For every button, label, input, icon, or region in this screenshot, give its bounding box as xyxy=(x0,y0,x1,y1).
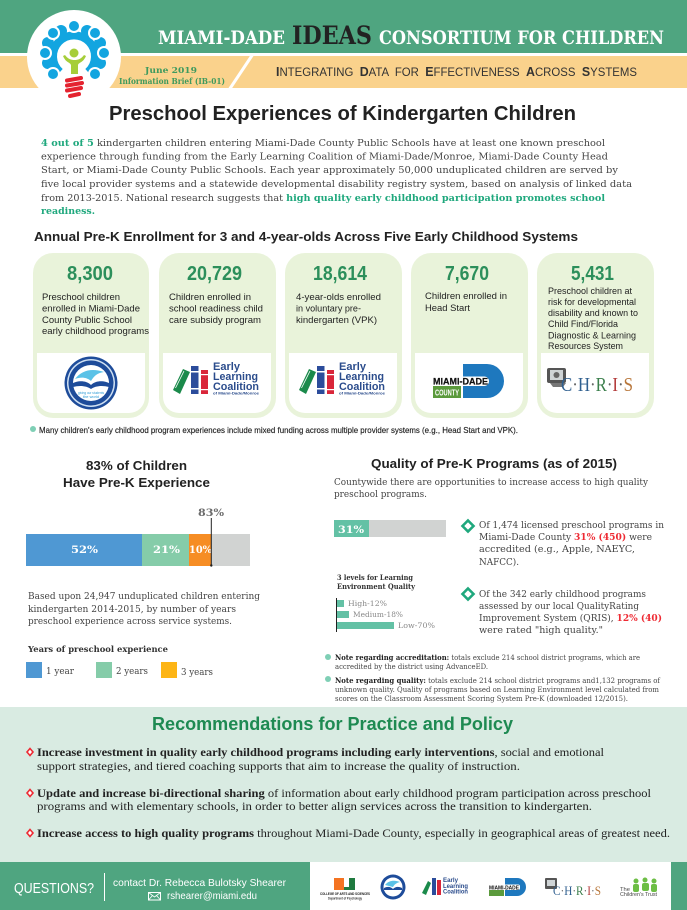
chart legend: 1 year xyxy=(46,666,74,677)
intro paragraph: experience through funding from the Early Learning Coalition of Miami-Dade/Monroe, Miami-Dade County Head xyxy=(41,152,608,162)
intro paragraph: Start, or Miami-Dade County Public Schools. Each year approximately 50,000 unduplicated children are served by xyxy=(41,165,619,176)
intro paragraph: from 2013-2015. National research suggests that high quality early childhood participation promotes school xyxy=(41,193,605,204)
card description xyxy=(548,286,638,352)
recommendation 2: programs and with elementary schools, in order to better align services across the transition to kindergarten. xyxy=(37,801,592,813)
icon: Early Learning Coalition logo xyxy=(299,361,385,396)
quality rating callout: Improvement System (QRIS), 12% (40) xyxy=(479,613,662,624)
quality rating callout: were rated "high quality." xyxy=(479,625,603,636)
icon: Early Learning Coalition small: Coalition xyxy=(443,888,468,896)
heading: 83 percent: 83% of Children xyxy=(86,458,187,473)
icon: Early Learning Coalition logo: Coalition xyxy=(339,381,385,393)
card description: Head Start xyxy=(425,303,470,314)
panel: school readiness card xyxy=(159,253,276,418)
quality rating callout: assessed by our local QualityRating xyxy=(479,601,639,612)
intro paragraph: five local provider systems and a statewide developmental disability registry system, based on analysis of linked data xyxy=(41,179,632,190)
stacked bar chart: years of pre-k: 10% xyxy=(189,545,212,556)
note: quality xyxy=(325,676,661,703)
enrollment heading: Annual Pre-K Enrollment for 3 and 4-year-olds Across Five Early Childhood Systems xyxy=(34,229,578,244)
date and brief number: June 2019 xyxy=(144,66,197,76)
card description: care subsidy program xyxy=(169,315,261,326)
icon: Early Learning Coalition logo: Learning xyxy=(213,371,258,383)
note: quality: scores on the Classroom Assessment Scoring System Pre-K (downloaded 12/2015). xyxy=(335,694,628,703)
chart description xyxy=(28,591,260,627)
icon: CHRIS logo: C·H·R·I·S xyxy=(561,374,633,396)
learning environment quality chart: High-12% xyxy=(348,600,387,608)
icon: University of Miami logo: Department of Psychology xyxy=(328,896,362,900)
icon: Early Learning Coalition logo: Learning xyxy=(339,371,384,383)
tagline: INTEGRATING DATA FOR EFFECTIVENESS ACROSS SYSTEMS xyxy=(276,65,637,79)
quality rating callout xyxy=(462,588,662,636)
accreditation callout: Of 1,474 licensed preschool programs in xyxy=(479,520,664,531)
icon: Early Learning Coalition logo: Coalition xyxy=(213,381,259,393)
recommendation 3: Increase access to high quality programs throughout Miami-Dade County, especially in geographical areas of greatest need. xyxy=(37,828,670,840)
card description: risk for developmental xyxy=(548,297,636,308)
icon: The Children's Trust xyxy=(620,878,658,898)
card description: Preschool children xyxy=(42,292,120,303)
panel: public school card xyxy=(33,253,149,418)
panel: public school card: 8,300 xyxy=(67,263,113,285)
card description: kindergarten (VPK) xyxy=(296,315,377,326)
heading: 83 percent xyxy=(63,458,210,490)
icon: Miami-Dade small: MIAMI-DADE xyxy=(489,886,519,892)
intro paragraph xyxy=(41,138,632,217)
panel: voluntary pre-k card: 18,614 xyxy=(313,263,368,285)
icon: teal diamond xyxy=(462,520,474,532)
card description: Preschool children at xyxy=(548,286,632,297)
panel: head start card xyxy=(411,253,528,418)
quality intro text xyxy=(334,477,649,500)
panel: CHRIS card: 5,431 xyxy=(571,263,614,285)
icon: The Children's Trust: The xyxy=(620,887,630,893)
contact details: rshearer@miami.edu xyxy=(167,890,257,902)
icon: Early Learning Coalition logo: of Miami-Dade/Monroe xyxy=(213,392,259,396)
icon: school seal small xyxy=(380,874,406,900)
questions label: QUESTIONS? xyxy=(14,880,94,897)
panel: head start card: 7,670 xyxy=(445,263,489,285)
chart legend: 2 years xyxy=(116,666,148,677)
icon: Miami-Dade County logo xyxy=(433,364,504,398)
icon: University of Miami logo xyxy=(320,878,371,900)
recommendation 1: Increase investment in quality early childhood programs including early interventions , social and emotional xyxy=(37,747,604,759)
icon: Early Learning Coalition logo: Early xyxy=(213,361,241,373)
icon: Early Learning Coalition small xyxy=(422,877,468,896)
chart description: preschool experience across service systems. xyxy=(28,616,232,627)
icon: Early Learning Coalition logo: Early xyxy=(339,361,367,373)
recommendation 2 xyxy=(27,788,651,813)
bar: 31 percent accredited: 31% xyxy=(338,525,365,536)
card description: Resources System xyxy=(548,341,623,352)
card description xyxy=(42,292,149,337)
card description: 4-year-olds enrolled xyxy=(296,292,381,303)
icon: Miami-Dade small xyxy=(489,878,526,896)
note: accreditation: Note regarding accreditation: totals exclude 214 school district programs, which are xyxy=(335,653,640,662)
quality intro text: preschool programs. xyxy=(334,489,427,500)
icon: Early Learning Coalition logo: of Miami-Dade/Monroe xyxy=(339,392,385,396)
chart description: Based upon 24,947 unduplicated children entering xyxy=(28,591,260,602)
card description: County Public School xyxy=(42,315,132,326)
quality rating callout: Of the 342 early childhood programs xyxy=(479,589,646,600)
card description xyxy=(425,291,507,314)
icon: lightbulb gear logo xyxy=(27,10,121,104)
accreditation callout xyxy=(462,520,664,568)
main title: Preschool Experiences of Kindergarten Children xyxy=(109,103,576,125)
card description xyxy=(169,292,263,326)
icon: CHRIS logo xyxy=(547,368,633,396)
note: quality: Note regarding quality: totals exclude 214 school district programs and1,132 programs of xyxy=(335,676,661,685)
icon: Miami-Dade County logo: COUNTY xyxy=(435,388,459,398)
intro paragraph: readiness. xyxy=(41,206,95,217)
icon: Early Learning Coalition small: Learning xyxy=(443,883,468,890)
icon: school district seal: giving our students xyxy=(78,391,104,395)
card description: Children enrolled in xyxy=(169,292,251,303)
icon: CHRIS small xyxy=(545,878,601,898)
stacked bar chart: years of pre-k xyxy=(26,508,250,567)
panel: recommendations xyxy=(0,707,687,862)
icon: The Children's Trust: Children's Trust xyxy=(620,892,658,898)
card description: Children enrolled in xyxy=(425,291,507,302)
note: accreditation xyxy=(325,653,640,671)
stacked bar chart: years of pre-k: 83% xyxy=(198,508,225,519)
contact details xyxy=(113,877,286,902)
icon: Early Learning Coalition small: Early xyxy=(443,877,458,884)
learning environment quality chart: Environment Quality xyxy=(337,582,416,591)
accreditation callout: Miami-Dade County 31% (450) were xyxy=(479,532,652,543)
recommendation 1: support strategies, and tiered coaching supports that aim to increase the quality of instruction. xyxy=(37,761,520,773)
card description: Diagnostic & Learning xyxy=(548,330,636,342)
quality intro text: Countywide there are opportunities to increase access to high quality xyxy=(334,477,649,488)
chart legend: Years of preschool experience xyxy=(27,645,169,655)
stacked bar chart: years of pre-k: 52% xyxy=(71,545,99,556)
icon: Miami-Dade County logo: MIAMI-DADE xyxy=(433,376,488,388)
chart legend: 3 years xyxy=(181,667,213,678)
recommendations heading: Recommendations for Practice and Policy xyxy=(152,714,513,734)
heading: 83 percent: Have Pre-K Experience xyxy=(63,475,210,490)
chart description: kindergarten 2014-2015, by number of years xyxy=(28,604,236,615)
card description xyxy=(296,292,381,326)
panel: CHRIS card xyxy=(537,253,654,418)
icon: school district seal: the world xyxy=(83,395,99,399)
learning environment quality chart: Medium-18% xyxy=(353,611,403,619)
learning environment quality chart: 3 levels for Learning xyxy=(337,573,413,582)
intro paragraph: 4 out of 5 kindergarten children entering Miami-Dade County Public Schools have at least one known preschool xyxy=(41,138,605,149)
icon: CHRIS small: C·H·R·I·S xyxy=(553,883,601,898)
recommendation 2: Update and increase bi-directional sharing of information about early childhood program participation across preschool xyxy=(37,788,651,800)
card description: in voluntary pre- xyxy=(296,304,361,314)
panel: voluntary pre-k card xyxy=(285,253,402,418)
chart legend xyxy=(26,645,213,678)
consortium title xyxy=(158,21,664,50)
partner logos xyxy=(320,874,658,900)
icon: school district seal xyxy=(64,356,118,410)
date and brief number: Information Brief (IB-01) xyxy=(119,76,225,86)
card description: early childhood programs xyxy=(42,326,149,337)
icon: teal diamond xyxy=(462,588,474,600)
contact details: contact Dr. Rebecca Bulotsky Shearer xyxy=(113,877,286,889)
icon: University of Miami logo: COLLEGE OF ARTS AND SCIENCES xyxy=(320,892,371,896)
consortium title: MIAMI-DADE xyxy=(158,27,285,49)
recommendation 1 xyxy=(27,747,604,773)
card description: disability and known to xyxy=(548,308,638,319)
learning environment quality chart xyxy=(336,573,435,632)
bar: 31 percent accredited xyxy=(334,520,446,537)
header banner xyxy=(0,0,687,104)
accreditation callout: NAFCC). xyxy=(479,557,519,568)
card description: school readiness child xyxy=(169,304,263,314)
consortium title: IDEAS xyxy=(292,21,372,50)
note: quality: unknown quality. Quality of programs based on Learning Environment level calculated from xyxy=(335,685,659,694)
note: accreditation: accredited by the district using AdvanceED. xyxy=(335,662,488,671)
learning environment quality chart: Low-70% xyxy=(398,622,435,630)
date and brief number xyxy=(119,66,225,86)
heading: quality of programs: Quality of Pre-K Programs (as of 2015) xyxy=(371,456,617,471)
stacked bar chart: years of pre-k: 21% xyxy=(153,545,181,556)
card description: enrolled in Miami-Dade xyxy=(42,304,140,314)
mixed funding note: Many children's early childhood program experiences include mixed funding across multiple provider systems (e.g., Head Start and VPK). xyxy=(39,426,518,435)
icon: Early Learning Coalition logo xyxy=(173,361,259,396)
accreditation callout: accredited (e.g., Apple, NAEYC, xyxy=(479,544,635,555)
footer xyxy=(0,862,687,910)
card description: Child Find/Florida xyxy=(548,319,619,330)
panel: school readiness card: 20,729 xyxy=(187,263,242,285)
